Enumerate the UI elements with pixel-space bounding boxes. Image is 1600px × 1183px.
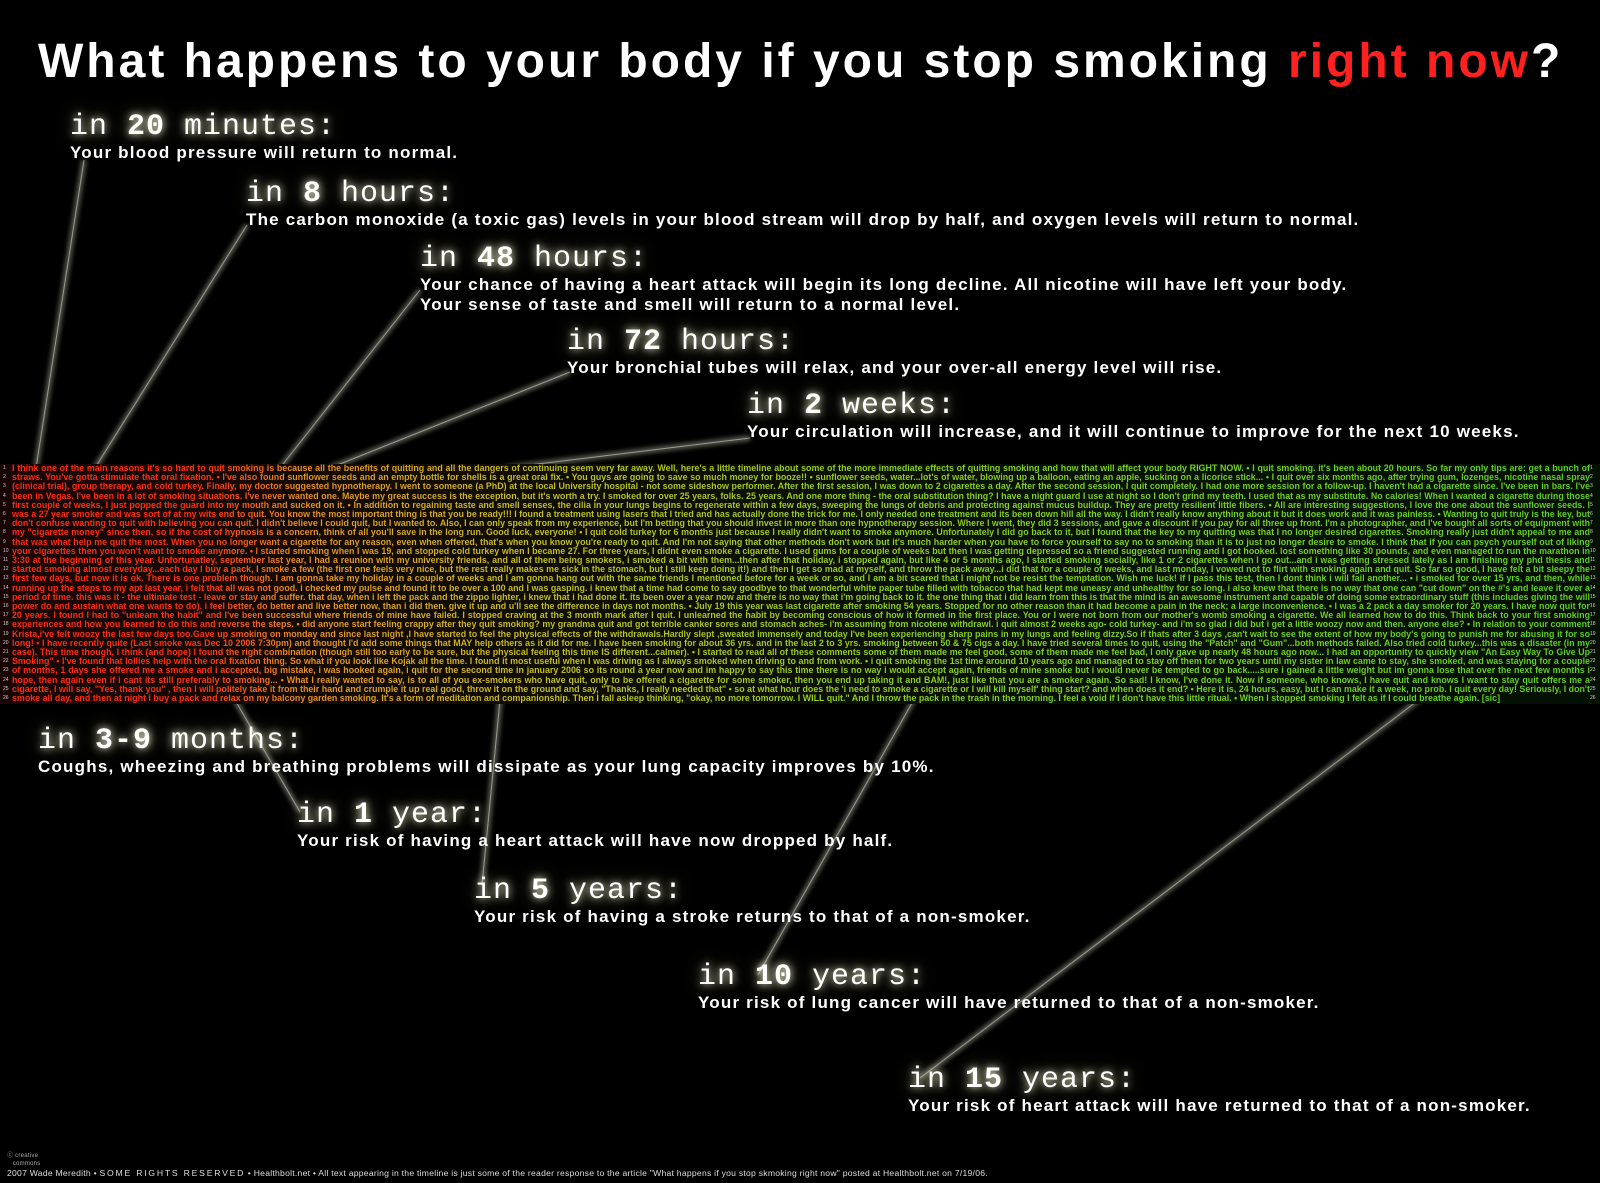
footer credit: 2007 Wade Meredith • SOME RIGHTS RESERVED • Healthbolt.net • All text appearing in the timeline is just some of the reader response to the article "What happens if you stop skmoking right now" posted at Healthbolt.net on 7/19/06. bbox=[7, 1168, 988, 1178]
milestone: 1 year: Your risk of having a heart attack will have now dropped by half. bbox=[297, 831, 893, 850]
milestone: 20 minutes: in 20 minutes: bbox=[70, 110, 336, 144]
title: What happens to your body if you stop smoking right now? bbox=[38, 35, 1563, 88]
milestone: 2 weeks: in 2 weeks: bbox=[747, 389, 956, 423]
band: reader responses: 16 bbox=[3, 603, 9, 609]
band: reader responses: 6 bbox=[3, 511, 6, 517]
milestone: 48 hours bbox=[416, 238, 1347, 314]
band: reader responses: 2 bbox=[3, 474, 6, 480]
band: reader responses: 5 bbox=[1590, 502, 1593, 508]
milestone: 72 hours: in 72 hours: bbox=[567, 325, 795, 359]
band: reader responses: 14 bbox=[1590, 585, 1596, 591]
band: reader responses: 25 bbox=[1590, 686, 1596, 692]
band: reader responses: 7 bbox=[1590, 520, 1593, 526]
band: reader responses: 16 bbox=[1590, 603, 1596, 609]
band: reader responses: 2 bbox=[1590, 474, 1593, 480]
band: reader responses: 1 bbox=[3, 465, 6, 471]
milestone: 8 hours: The carbon monoxide (a toxic gas) levels in your blood stream will drop by half, and oxygen levels will return to normal. bbox=[246, 210, 1359, 229]
milestone: 72 hours bbox=[564, 321, 1222, 377]
milestone: 48 hours: Your sense of taste and smell will return to a normal level. bbox=[420, 295, 960, 314]
milestone: 2 weeks: Your circulation will increase, and it will continue to improve for the next 10 weeks. bbox=[747, 422, 1520, 441]
milestone: 10 years bbox=[694, 956, 1320, 1012]
band: reader responses: 21 bbox=[3, 649, 9, 655]
band: reader responses: 18 bbox=[3, 621, 9, 627]
milestone: 2 weeks bbox=[744, 386, 1520, 441]
band: reader responses: 1 bbox=[1590, 465, 1593, 471]
band: reader responses: 13 bbox=[3, 575, 9, 581]
band: reader responses: 20 bbox=[1590, 640, 1596, 646]
milestone: 5 years: Your risk of having a stroke returns to that of a non-smoker. bbox=[474, 907, 1031, 926]
band: reader responses: 24 bbox=[3, 677, 9, 683]
milestone: 15 years bbox=[904, 1059, 1531, 1115]
band: reader responses: 9 bbox=[3, 539, 6, 545]
band: reader responses: 7 bbox=[3, 520, 6, 526]
band: reader responses: 15 bbox=[1590, 594, 1596, 600]
footer credit: ⓒ creative bbox=[7, 1153, 38, 1159]
milestone: 20 minutes: Your blood pressure will return to normal. bbox=[70, 143, 458, 162]
band: reader responses: 12 bbox=[1590, 566, 1596, 572]
band: reader responses: 8 bbox=[1590, 529, 1593, 535]
band: reader responses: 23 bbox=[3, 667, 9, 673]
band: reader responses: 10 bbox=[3, 548, 9, 554]
band: reader responses: 21 bbox=[1590, 649, 1596, 655]
band: reader responses: I think one of the main reasons it's so hard to quit smoking is because all the benefits of quitting and all the dangers of continuing seem very far away. Well, here's a little timeline about some of the more immediate effects of quitting smoking and how that will affect your body RIGHT NOW. • I quit smoking. it's been about 20 hours. So far my only tips are: get a bunch of straws. You've gotta stimulate that oral fixation. • I've also found sunflower seeds and an empty bottle for shells is a great oral fix. • You guys are going to save so much money for booze!! • sunflower seeds, water...lot's of water, blowing up a balloon, eating an apple, sucking on a licorice stick... • I quit over six months ago, after trying gum, lozenges, nicotine nasal spray (clinical trial), group therapy, and cold turkey. Finally, my doctor suggested hypnotherapy. I went to someone (a PhD) at the local University hospital - not some sideshow performer. After the first session, I was down to 2 cigarettes a day. After the second session, I quit completely. I had one more session for a follow-up. I haven't had a cigarette since. I've been in bars. I've been in Vegas. I've been in a lot of smoking situations. I've never wanted one. Maybe my great success is the exception, but it's worth a try. I smoked for over 25 years, folks. 25 years. And one more thing - the oral substitution thing? I have a night guard I use at night so I don't grind my teeth. I used that as my substitute. No calories! When I wanted a cigarette during those first couple of weeks, I just popped the guard into my mouth and sucked on it. • In addition to regaining taste and smell senses, the cilia in your lungs begins to regenerate within a few days, sweeping the lungs of debris and protecting against mucus buildup. They are pretty resilient little fibers. • All are interesting suggestions, I love the one about the sunflower seeds. I was a 27 year smoker and was sort of at my wits end to quit. You know the most important thing is that you be ready!!! I found a treatment using lasers that I tried and has actually done the trick for me. I only needed one treatment and its been down hill all the way. I didn't really know anything about it but it does work and it was painless. • Wanting to quit truly is the key, but don't confuse wanting to quit with believing you can quit. I didn't believe I could quit, but I wanted to. Also, I can only speak from my experience, but I'm betting that you should invest in more than one hypnotherapy session. Where I went, they did 3 sessions, and gave a discount if you pay for all three up front. I'm a photographer, and I've bought all sorts of equipment with my "cigarette money" since then, so if the cost of hypnosis is a concern, think of all you'll save in the long run. Good luck, everyone! • I quit cold turkey for 6 months just because I really didn't want to smoke anymore. Unfortunately I did go back to it, but I found that the key to my quitting was that I no longer desired cigarettes. Smoking really just didn't appeal to me and that was what help me quit the most. When you no longer want a cigarette for any reason, even when offered, that's when you know you're ready to quit. And I'm not saying that other methods don't work but it's much harder when you have to force yourself to say no to smoking than it is to just no longer desire to smoke. I think that if you can psych yourself out of liking your cigarettes then you won't want to smoke anymore. • I started smoking when I was 19, and stopped cold turkey when I became 27. For three years, I didnt even smoke a cigarette. I used gums for a couple of weeks but then I was getting depressed so a friend suggested running and I got hooked. lost something like 30 pounds, and even managed to run the marathon in 3:30 at the beginning of this year. Unfortunatley, september last year, I had a reunion with my university friends, and all of them being smokers, i smoked a bit with them...then after that holiday, i bbox=[12, 464, 1590, 703]
band: reader responses: 4 bbox=[3, 493, 6, 499]
milestone: 1 year: in 1 year: bbox=[297, 798, 487, 832]
band: reader responses: 17 bbox=[1590, 612, 1596, 618]
band: reader responses: 3 bbox=[1590, 483, 1593, 489]
milestone: 1 year bbox=[294, 795, 893, 850]
band: reader responses: 23 bbox=[1590, 667, 1596, 673]
band: reader responses: 3 bbox=[3, 483, 6, 489]
milestone: 3-9 months: Coughs, wheezing and breathing problems will dissipate as your lung capacity improves by 10%. bbox=[38, 757, 935, 776]
milestone: 5 years bbox=[470, 870, 1031, 926]
band: reader responses: 10 bbox=[1590, 548, 1596, 554]
band: reader responses: 25 bbox=[3, 686, 9, 692]
milestone: 5 years: in 5 years: bbox=[474, 874, 683, 908]
band: reader responses: 6 bbox=[1590, 511, 1593, 517]
footer credit bbox=[7, 1152, 988, 1178]
band: reader responses: 22 bbox=[1590, 658, 1596, 664]
band: reader responses: 15 bbox=[3, 594, 9, 600]
footer credit: commons bbox=[13, 1161, 41, 1167]
band: reader responses: 5 bbox=[3, 502, 6, 508]
milestone: 15 years: in 15 years: bbox=[908, 1063, 1136, 1097]
band: reader responses: 12 bbox=[3, 566, 9, 572]
milestone: 3-9 months: in 3-9 months: bbox=[38, 724, 304, 758]
band: reader responses: 17 bbox=[3, 612, 9, 618]
band: reader responses: 26 bbox=[3, 695, 9, 701]
milestone: 3-9 months bbox=[34, 720, 935, 776]
milestone: 8 hours: in 8 hours: bbox=[246, 177, 455, 211]
band: reader responses: 24 bbox=[1590, 677, 1596, 683]
milestone: 10 years: in 10 years: bbox=[698, 960, 926, 994]
band: reader responses: 8 bbox=[3, 529, 6, 535]
milestone: 48 hours: in 48 hours: bbox=[420, 242, 648, 276]
band: reader responses: 4 bbox=[1590, 493, 1593, 499]
band: reader responses: 14 bbox=[3, 585, 9, 591]
milestone: 48 hours: Your chance of having a heart attack will begin its long decline. All nicotine will have left your body. bbox=[420, 275, 1347, 294]
band: reader responses: 13 bbox=[1590, 575, 1596, 581]
band: reader responses: 11 bbox=[1590, 557, 1595, 563]
milestone: 15 years: Your risk of heart attack will have returned to that of a non-smoker. bbox=[908, 1096, 1531, 1115]
band: reader responses: 20 bbox=[3, 640, 9, 646]
milestone: 72 hours: Your bronchial tubes will relax, and your over-all energy level will rise. bbox=[567, 358, 1222, 377]
band: reader responses: 9 bbox=[1590, 539, 1593, 545]
band: reader responses: 11 bbox=[3, 557, 8, 563]
band: reader responses: 22 bbox=[3, 658, 9, 664]
band: reader responses: 19 bbox=[1590, 631, 1596, 637]
band: reader responses: 26 bbox=[1590, 695, 1596, 701]
band: reader responses: 18 bbox=[1590, 621, 1596, 627]
milestone: 20 minutes bbox=[66, 106, 458, 162]
milestone: 10 years: Your risk of lung cancer will have returned to that of a non-smoker. bbox=[698, 993, 1320, 1012]
band: reader responses: 19 bbox=[3, 631, 9, 637]
milestone: 8 hours bbox=[242, 173, 1359, 229]
